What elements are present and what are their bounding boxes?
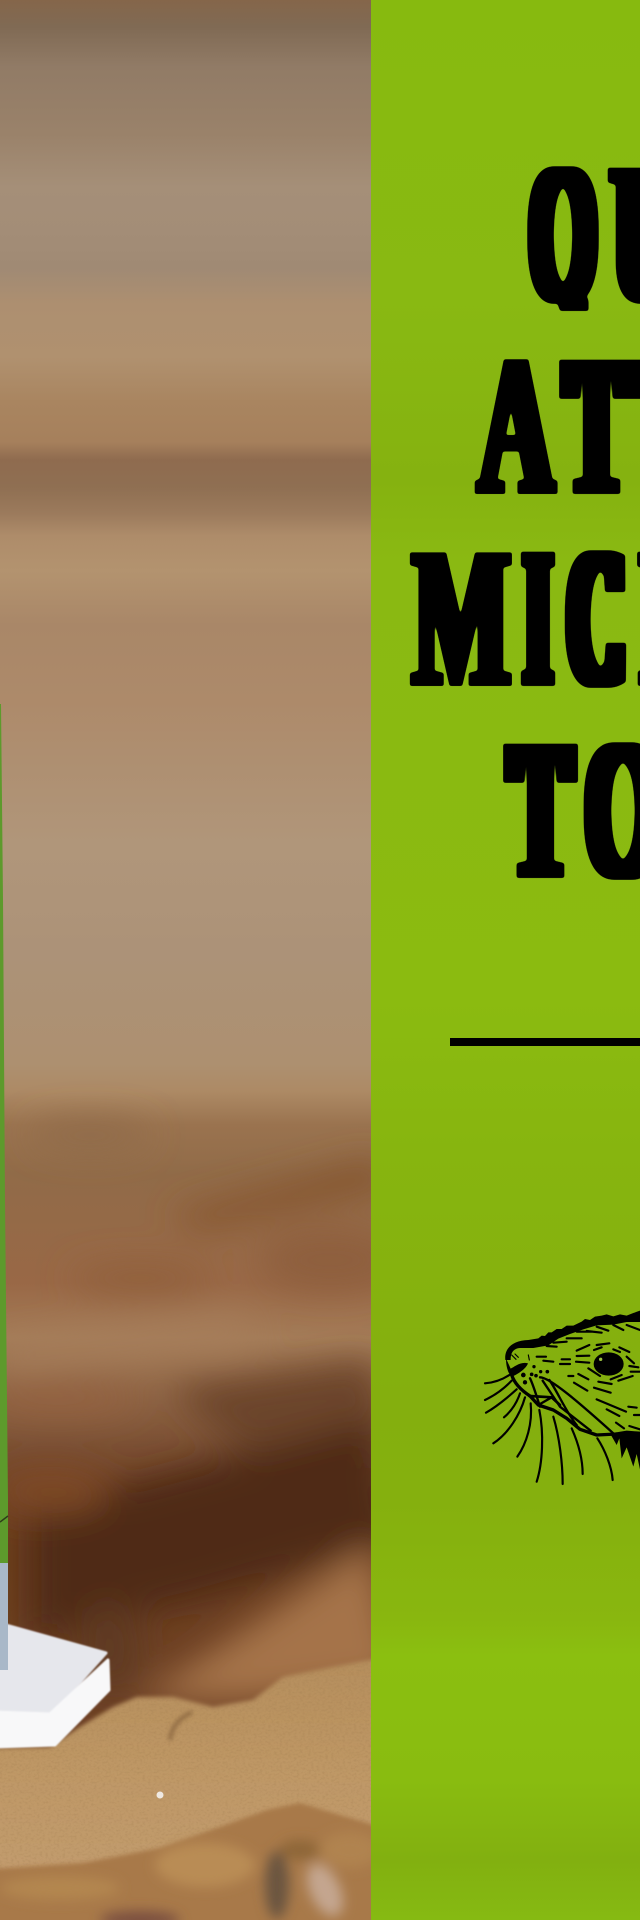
title: [413, 127, 640, 915]
rock in foreground: [0, 1803, 391, 1920]
blurred wood grain shapes: [0, 1121, 400, 1700]
title line 2: [479, 317, 640, 533]
otter jaw and muzzle lines: [512, 1375, 617, 1435]
otter muzzle dots: [521, 1365, 549, 1384]
title line 1: [527, 166, 640, 312]
title line 3: C: [571, 513, 621, 723]
title line 4: [510, 704, 640, 915]
white base of green object: [0, 1622, 109, 1747]
title line 3: [413, 509, 640, 726]
title line 3: M: [413, 509, 510, 726]
sand wood surface: [0, 1658, 371, 1872]
title line 2: T: [566, 320, 627, 530]
title line 3: I: [528, 512, 548, 723]
panel: green overlay: [371, 0, 640, 1920]
title line 4: T: [510, 704, 571, 914]
title line 2: A: [479, 317, 553, 533]
otter fur top and snout: [505, 1311, 640, 1360]
icon: otter head: [485, 1311, 640, 1484]
title, rule and otter artwork: [410, 166, 640, 1486]
divider rule: [450, 1038, 640, 1046]
otter whiskers: [485, 1375, 613, 1484]
otter eye: [594, 1352, 624, 1376]
panel: blurred wood photo: [0, 0, 371, 1920]
otter fur dashes: [512, 1325, 640, 1429]
otter neck: [610, 1431, 640, 1473]
title line 1: Q: [533, 127, 593, 338]
otter nose: [506, 1358, 528, 1377]
green stem of object: [0, 704, 8, 1670]
